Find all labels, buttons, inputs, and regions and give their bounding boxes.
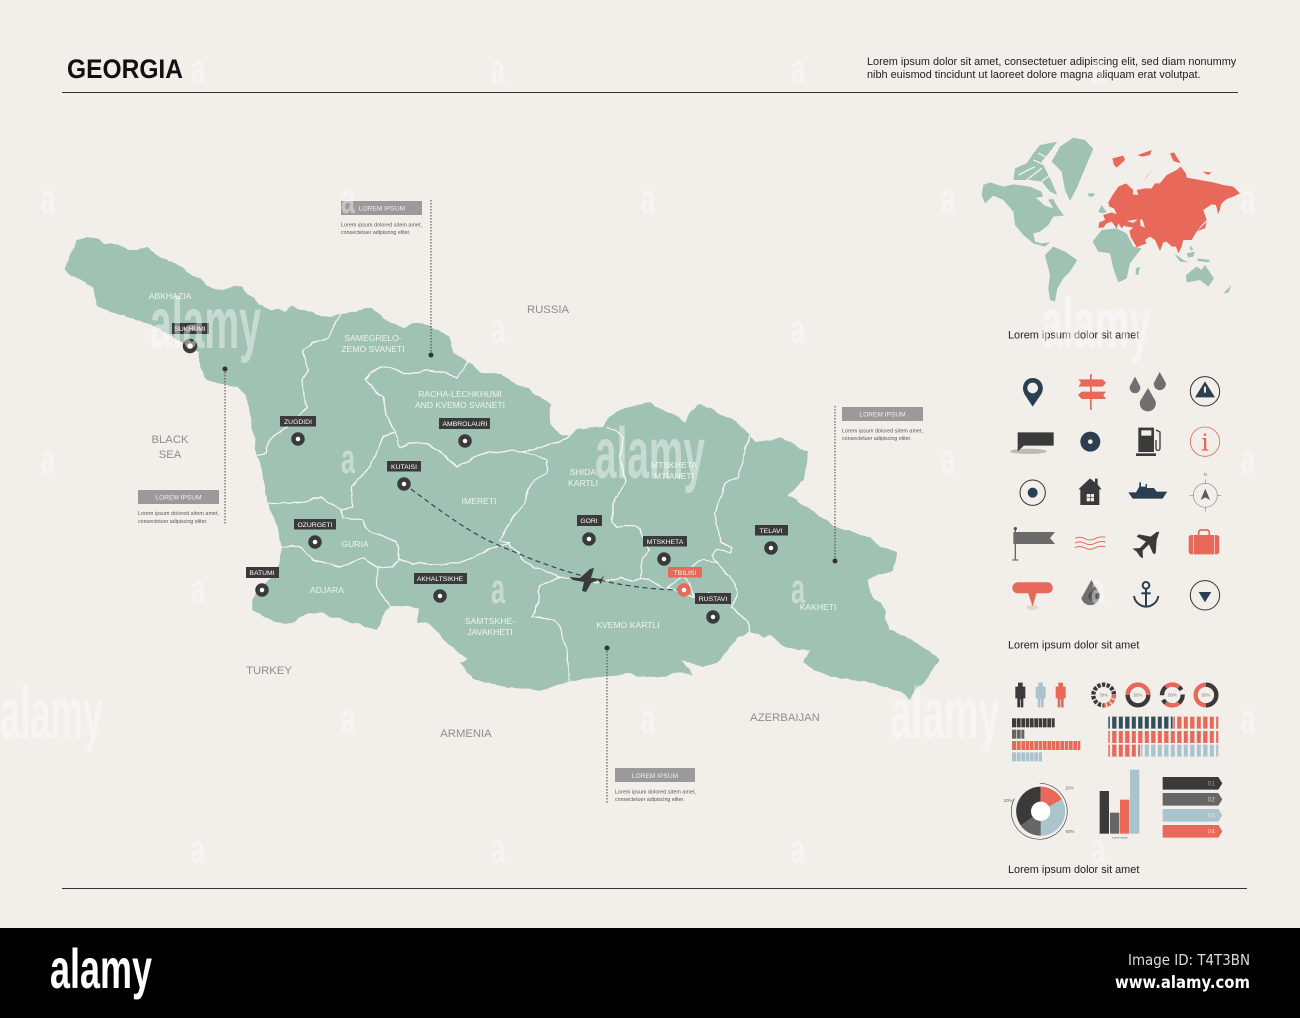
watermarks: a — [191, 565, 205, 612]
region labels: KARTLI — [568, 478, 598, 488]
numbered arrows: 04 — [1208, 829, 1215, 836]
neighbouring labels: RUSSIA — [527, 304, 569, 316]
caption: charts: Lorem ipsum dolor sit amet — [1008, 864, 1139, 876]
watermarks: a — [1241, 435, 1255, 482]
callout: right: consectetuer adipiscing eliter. — [842, 436, 912, 442]
callout: left: Lorem ipsum dolored sitem amet, — [138, 511, 219, 517]
pie chart: 20% — [1004, 798, 1012, 803]
icon: fuel pump — [1136, 428, 1160, 456]
callout: left — [138, 366, 228, 525]
icon: oil drop — [1081, 580, 1100, 605]
donut: 50% half: 50% — [1202, 693, 1210, 698]
city: Zugdidi — [280, 416, 316, 444]
watermarks: a — [941, 175, 955, 222]
icon: suitcase — [1189, 530, 1219, 554]
city: Kutaisi — [387, 461, 421, 488]
neighbouring labels — [151, 304, 820, 740]
callout: right: LOREM IPSUM — [859, 412, 906, 418]
region labels: SAMTSKHE- — [465, 616, 515, 626]
map of Georgia — [64, 238, 940, 700]
city: Gori — [577, 515, 602, 544]
neighbouring labels: TURKEY — [246, 665, 292, 677]
callout: top: consectetuer adipiscing eliter. — [341, 230, 410, 236]
title: GEORGIA — [67, 54, 183, 84]
icon: water drops — [1130, 372, 1166, 411]
icon: ring with dot — [1020, 480, 1045, 505]
icon: info — [1190, 427, 1220, 456]
city: Batumi: BATUMI — [249, 570, 275, 577]
region labels: GURIA — [341, 539, 369, 549]
region labels: ABKHAZIA — [149, 291, 192, 301]
footer bar: Image ID: T4T3BN — [1128, 951, 1250, 969]
watermarks: a — [41, 435, 55, 482]
bar chart: Lorem ipsum — [1112, 836, 1128, 840]
region labels: MTSKHETA — [651, 460, 697, 470]
watermarks: alamy — [595, 414, 705, 494]
region labels: IMERETI — [462, 496, 496, 506]
numbered arrows — [1163, 777, 1222, 838]
Eurasia highlighted — [1098, 150, 1240, 253]
callout: left: consectetuer adipiscing eliter. — [138, 519, 208, 525]
region labels: ADJARA — [310, 585, 344, 595]
donut: 30%: 30% — [1099, 693, 1108, 698]
city: Mtskheta: MTSKHETA — [647, 539, 684, 546]
icon: anchor — [1134, 582, 1158, 607]
city: Gori: GORI — [580, 518, 598, 525]
watermarks: a — [341, 435, 355, 482]
watermarks: a — [341, 695, 355, 742]
callout: left: LOREM IPSUM — [155, 494, 202, 502]
watermarks — [0, 45, 1255, 872]
city: Tbilisi capital: TBILISI — [674, 570, 696, 577]
callout: right — [832, 406, 923, 564]
city: Akhaltsikhe — [414, 573, 467, 600]
region labels: KVEMO KARTLI — [596, 620, 660, 630]
donut: 50% half — [1196, 685, 1216, 705]
inland seas — [1127, 219, 1145, 228]
watermarks: a — [791, 565, 805, 612]
pie chart: 15% — [1065, 785, 1074, 790]
neighbouring labels: BLACK — [151, 434, 189, 446]
watermarks: a — [491, 565, 505, 612]
neighbouring labels: SEA — [159, 449, 182, 461]
world map — [982, 138, 1240, 302]
icon: target disc — [1080, 432, 1100, 452]
numbered arrows: 01 — [1208, 781, 1215, 788]
city: Kutaisi: KUTAISI — [391, 464, 417, 471]
watermarks: a — [791, 45, 805, 92]
neighbouring labels: ARMENIA — [440, 728, 492, 740]
callout: top: Lorem ipsum dolored sitem amet, — [341, 222, 422, 228]
icon: ship — [1128, 482, 1167, 499]
region labels: SAMEGRELO- — [344, 333, 402, 343]
donut: 50% orange — [1128, 685, 1148, 705]
caption: world map: Lorem ipsum dolor sit amet — [1008, 330, 1139, 342]
city: Zugdidi: ZUGDIDI — [284, 419, 312, 426]
watermarks: a — [41, 175, 55, 222]
icon: signpost — [1078, 374, 1106, 410]
stacked unit bars — [1012, 718, 1080, 761]
region labels: SHIDA — [570, 467, 596, 477]
callout: bottom — [604, 646, 696, 803]
donut: 30% — [1093, 685, 1114, 705]
watermarks: alamy — [150, 284, 261, 364]
icon: compass: N — [1204, 472, 1207, 477]
watermarks: a — [641, 695, 655, 742]
city: Ozurgeti — [294, 519, 336, 546]
city: Telavi: TELAVI — [760, 528, 783, 535]
watermarks: a — [941, 435, 955, 482]
region labels — [149, 291, 836, 637]
watermarks: a — [1091, 825, 1105, 872]
city: Sukhumi: SUKHUMI — [174, 326, 206, 333]
icon: waves — [1075, 537, 1105, 549]
icon: airplane — [1132, 532, 1159, 558]
caption: icons: Lorem ipsum dolor sit amet — [1008, 640, 1139, 652]
region labels: ZEMO SVANETI — [341, 344, 405, 354]
numbered arrows: 03 — [1208, 813, 1215, 820]
watermarks: alamy — [1041, 284, 1151, 364]
city: Mtskheta — [643, 536, 687, 564]
watermarks: a — [1091, 45, 1105, 92]
city: Ambrolauri — [439, 418, 490, 446]
infographic set — [1004, 683, 1222, 841]
watermarks: a — [1241, 695, 1255, 742]
Americas, Greenland, Africa, Australia — [982, 138, 1232, 302]
country shape and region borders — [64, 238, 940, 700]
city: Tbilisi capital — [668, 567, 702, 594]
header description: nibh euismod tincidunt ut laoreet dolore magna aliquam erat volutpat. — [867, 69, 1201, 81]
watermarks: a — [641, 175, 655, 222]
footer bar: alamy — [50, 937, 152, 1000]
callout: bottom: LOREM IPSUM — [632, 773, 678, 780]
neighbouring labels: AZERBAIJAN — [750, 712, 820, 724]
icon: compass — [1189, 472, 1221, 511]
icon set — [1010, 372, 1221, 610]
arctic channels and Hudson bay — [1018, 153, 1053, 208]
city: Telavi — [755, 525, 788, 552]
footer bar — [0, 928, 1300, 1018]
icon: flag — [1012, 527, 1055, 561]
callout: top — [341, 200, 434, 358]
footer bar: www.alamy.com — [1115, 973, 1250, 993]
region labels: RACHA-LECHKHUMI — [418, 389, 502, 399]
people icons — [1015, 683, 1066, 707]
callout: top: LOREM IPSUM — [359, 206, 405, 212]
city: Ambrolauri: AMBROLAURI — [443, 421, 488, 428]
icon: map pin — [1023, 378, 1043, 407]
city: Batumi — [246, 567, 279, 594]
icon: speech bubble — [1010, 432, 1054, 454]
region labels: JAVAKHETI — [467, 627, 513, 637]
callout: right: Lorem ipsum dolored sitem amet, — [842, 428, 923, 434]
watermarks: a — [491, 305, 505, 352]
donut: 50% orange: 50% — [1134, 693, 1142, 698]
header description: Lorem ipsum dolor sit amet, consectetuer adipiscing elit, sed diam nonummy — [867, 56, 1237, 68]
numbered arrows: 02 — [1208, 797, 1215, 804]
bar chart — [1100, 770, 1139, 840]
icon: house — [1078, 478, 1102, 505]
region labels: AND KVEMO SVANETI — [415, 400, 505, 410]
watermarks: a — [1241, 175, 1255, 222]
watermarks: a — [191, 825, 205, 872]
watermarks: a — [491, 45, 505, 92]
donut: 50% segmented — [1162, 685, 1183, 705]
region labels: MTIANETI — [654, 471, 694, 481]
city: Rustavi — [695, 593, 731, 622]
watermarks: a — [791, 825, 805, 872]
callout: bottom: consectetuer adipiscing eliter. — [615, 797, 684, 803]
watermarks: a — [191, 45, 205, 92]
donut: 50% segmented: 50% — [1168, 693, 1177, 698]
plane icon — [569, 568, 604, 592]
callout: bottom: Lorem ipsum dolored sitem amet, — [615, 790, 696, 796]
watermarks: a — [341, 175, 355, 222]
watermarks: a — [791, 305, 805, 352]
city: Akhaltsikhe: AKHALTSIKHE — [417, 576, 464, 583]
watermarks: alamy — [890, 674, 1000, 754]
city: Rustavi: RUSTAVI — [699, 596, 727, 603]
watermarks: a — [1091, 565, 1105, 612]
flight route — [404, 484, 684, 590]
icon: arrow down circle — [1190, 581, 1220, 610]
icon: warning — [1190, 377, 1220, 406]
watermarks: a — [491, 825, 505, 872]
icon: map marker — [1012, 582, 1053, 610]
pictogram rows — [1108, 717, 1218, 757]
region labels: KAKHETI — [800, 602, 836, 612]
watermarks: alamy — [0, 674, 103, 754]
pie chart: 60% — [1066, 829, 1074, 834]
city: Ozurgeti: OZURGETI — [297, 522, 333, 529]
city: Sukhumi — [172, 323, 209, 351]
pie chart — [1004, 782, 1074, 841]
